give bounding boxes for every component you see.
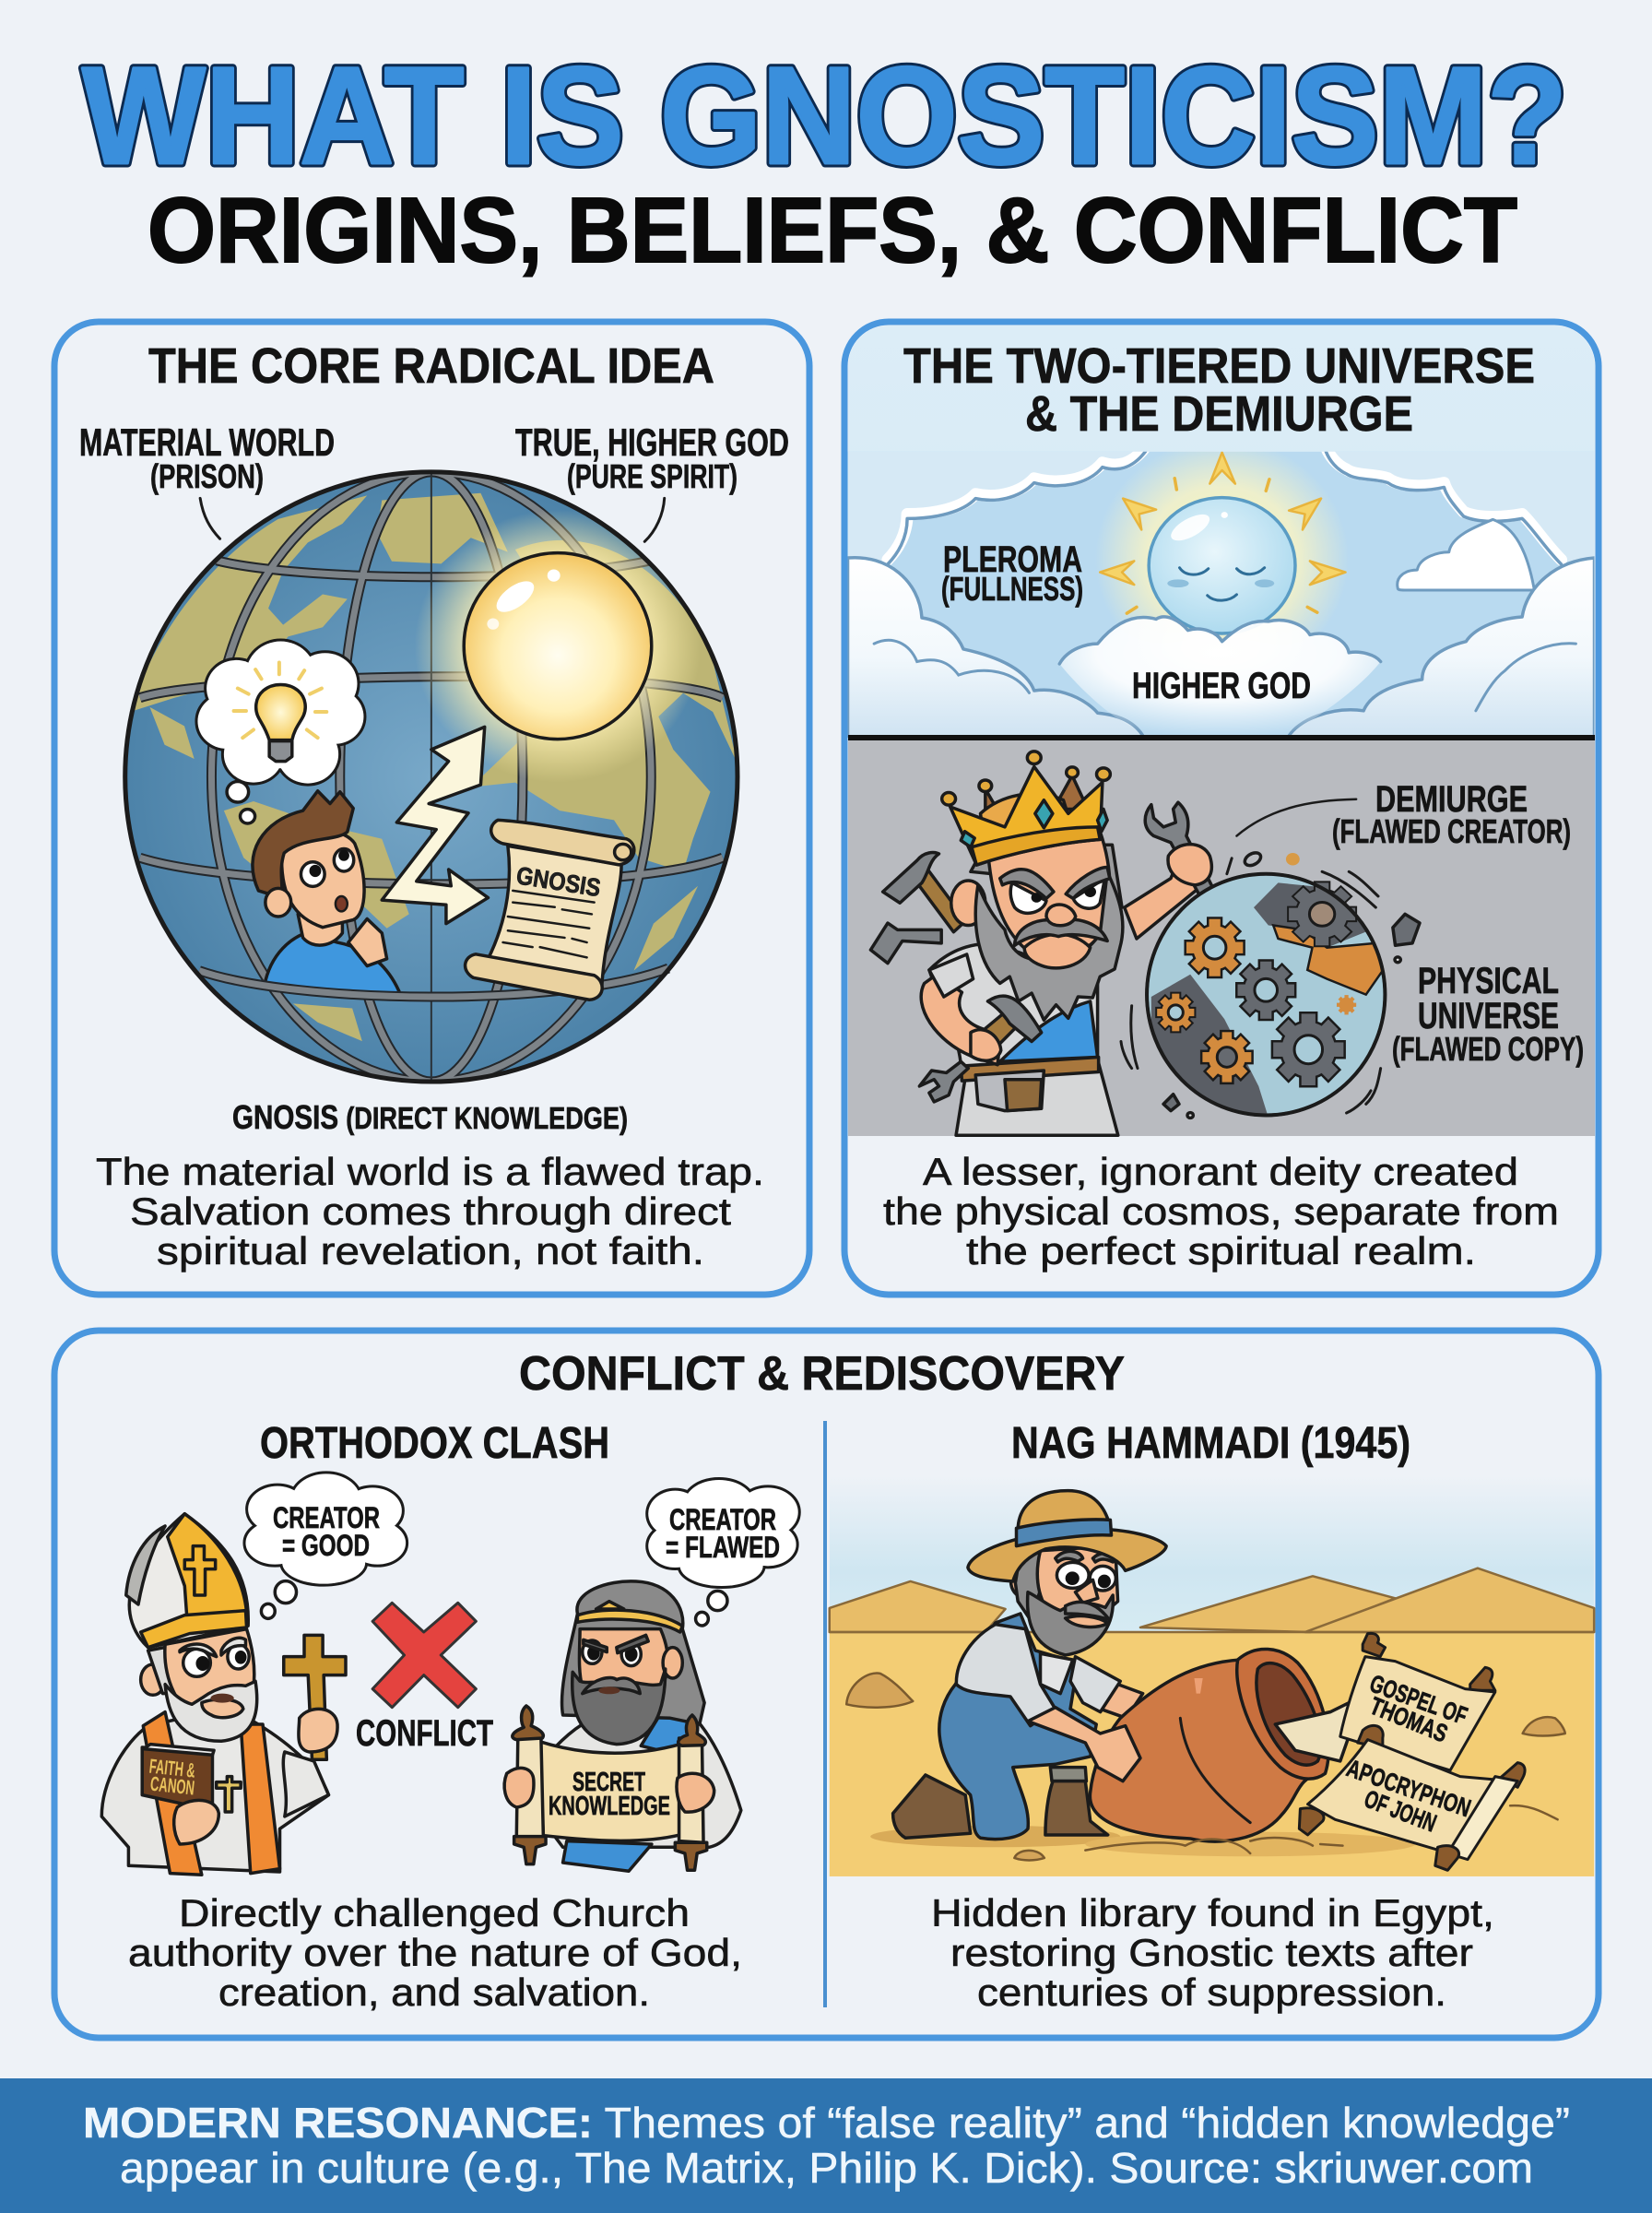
scroll text: KNOWLEDGE — [549, 1792, 670, 1821]
label: true higher god: (PURE SPIRIT) — [567, 457, 738, 495]
rocks — [846, 1674, 1565, 1860]
lower grid line — [199, 968, 668, 997]
scroll label: gnosis: GNOSIS — [514, 861, 603, 902]
label: material world: (PRISON) — [150, 457, 264, 495]
label: gnosis direct knowledge: GNOSIS (DIRECT KNOWLEDGE) — [232, 1098, 628, 1136]
scroll text: apocryphon of john: APOCRYPHON — [1343, 1754, 1474, 1822]
panel body text: spiritual revelation, not faith. — [157, 1229, 704, 1272]
demiurge labels: DEMIURGE — [1375, 779, 1528, 820]
illustration: nag hammadi desert scene — [830, 1475, 1594, 1876]
panel heading: THE CORE RADICAL IDEA — [148, 338, 714, 394]
scroll text: gospel of thomas — [1366, 1669, 1471, 1748]
panel: conflict and rediscovery — [54, 1331, 1599, 2038]
book label — [148, 1755, 196, 1800]
scroll text — [549, 1768, 670, 1821]
crown — [985, 775, 1088, 822]
panel body text: The material world is a flawed trap. — [96, 1150, 764, 1193]
scroll text: SECRET — [572, 1768, 645, 1797]
head — [1011, 1566, 1035, 1597]
raised arm and wrench — [1125, 867, 1202, 939]
conflict label: CONFLICT — [356, 1713, 493, 1754]
panel heading: & THE DEMIURGE — [1025, 386, 1413, 442]
scroll text: gospel of thomas: GOSPEL OF — [1366, 1669, 1471, 1730]
panel: the core radical idea — [54, 322, 809, 1295]
undershirt and bib strap — [1041, 1653, 1073, 1694]
globe illustration — [120, 467, 742, 1088]
label: material world: MATERIAL WORLD — [79, 420, 335, 464]
forearm behind jar — [1101, 1685, 1143, 1718]
illustration: orthodox clash — [101, 1473, 798, 1875]
bubble text: creator good — [273, 1501, 380, 1562]
body text: nag hammadi: restoring Gnostic texts after — [950, 1931, 1473, 1974]
illustration: pleroma and higher god — [848, 438, 1596, 738]
label: true higher god — [515, 420, 789, 495]
book label: CANON — [149, 1772, 195, 1800]
bubble text: creator good: = GOOD — [282, 1529, 370, 1562]
body text: nag hammadi: centuries of suppression. — [977, 1970, 1446, 2014]
panel frame — [844, 322, 1599, 1295]
panel heading — [903, 338, 1535, 442]
bubble text: creator flawed — [666, 1503, 780, 1564]
body text: orthodox clash — [128, 1891, 742, 2014]
jar — [1090, 1660, 1320, 1841]
panel body text: Salvation comes through direct — [130, 1189, 731, 1233]
demiurge labels — [1332, 779, 1571, 850]
body text: orthodox clash: creation, and salvation. — [218, 1970, 650, 2014]
panel heading: THE TWO-TIERED UNIVERSE — [903, 338, 1535, 394]
bubble text: creator flawed: = FLAWED — [666, 1531, 780, 1564]
column divider — [823, 1421, 827, 2007]
bishop — [101, 1718, 328, 1872]
panel body text — [883, 1150, 1559, 1272]
scroll — [483, 846, 621, 989]
red x — [372, 1603, 476, 1708]
lightning arrow — [382, 727, 488, 924]
thought bubble: creator good — [245, 1473, 406, 1618]
title: WHAT IS GNOSTICISM? — [82, 38, 1567, 193]
scroll text: apocryphon of john: OF JOHN — [1361, 1785, 1440, 1838]
panel frame — [54, 1331, 1599, 2038]
scroll: secret knowledge — [538, 1741, 680, 1840]
footer text — [83, 2099, 1570, 2192]
hammers behind — [912, 865, 966, 932]
body text: orthodox clash: Directly challenged Church — [179, 1891, 690, 1935]
bubble text: creator good: CREATOR — [273, 1501, 380, 1534]
subtitle: ORIGINS, BELIEFS, & CONFLICT — [148, 179, 1517, 282]
footer band — [0, 2078, 1652, 2213]
title: WHAT IS GNOSTICISM? — [82, 38, 1567, 193]
sub-heading: nag hammadi: NAG HAMMADI (1945) — [1011, 1419, 1410, 1468]
physical universe labels: (FLAWED COPY) — [1392, 1030, 1584, 1068]
body — [956, 1059, 1118, 1135]
panel body text: the perfect spiritual realm. — [966, 1229, 1476, 1272]
sub-heading: orthodox clash: ORTHODOX CLASH — [260, 1419, 609, 1468]
panel frame — [54, 322, 809, 1295]
label: material world — [79, 420, 335, 495]
head — [951, 881, 985, 925]
sky labels: HIGHER GOD — [1132, 666, 1311, 706]
panel: two-tiered universe — [844, 322, 1599, 1295]
thought cloud — [197, 642, 363, 823]
panel heading: CONFLICT & REDISCOVERY — [519, 1347, 1125, 1401]
physical universe labels: PHYSICAL — [1418, 961, 1559, 1001]
sky labels — [941, 539, 1311, 706]
bubble text: creator flawed: CREATOR — [669, 1503, 776, 1536]
panel body text: the physical cosmos, separate from — [883, 1189, 1559, 1233]
left arm and hammer — [921, 975, 1000, 1065]
scroll: apocryphon of john — [1299, 1725, 1525, 1870]
loose scroll in jar — [1275, 1699, 1355, 1761]
gnostic figure — [522, 1709, 741, 1847]
forearm and hand on jar — [1028, 1708, 1140, 1781]
footer text: MODERN RESONANCE: Themes of “false reality” and “hidden knowledge” — [83, 2099, 1570, 2147]
sky labels: PLEROMA — [943, 539, 1082, 580]
label: true higher god: TRUE, HIGHER GOD — [515, 420, 789, 464]
body text: nag hammadi — [931, 1891, 1494, 2014]
divider between realms — [848, 735, 1595, 740]
person — [265, 933, 401, 995]
body text: orthodox clash: authority over the nature of God, — [128, 1931, 742, 1974]
illustration: demiurge and flawed cosmos — [870, 751, 1420, 1135]
footer text: appear in culture (e.g., The Matrix, Philip K. Dick). Source: skriuwer.com — [120, 2144, 1533, 2192]
scroll text: gospel of thomas: THOMAS — [1366, 1692, 1452, 1748]
panel body text — [96, 1150, 764, 1272]
panel body text: A lesser, ignorant deity created — [923, 1150, 1518, 1193]
physical universe labels: UNIVERSE — [1418, 996, 1559, 1036]
sky labels: (FULLNESS) — [941, 570, 1083, 608]
body text: nag hammadi: Hidden library found in Egypt, — [931, 1891, 1494, 1935]
hat — [968, 1529, 1166, 1581]
thought bubble: creator flawed — [648, 1480, 798, 1626]
boots — [893, 1775, 971, 1838]
overalls — [939, 1614, 1096, 1840]
gray lower realm background — [848, 738, 1595, 1136]
book label: FAITH & — [148, 1755, 196, 1782]
sky background — [848, 325, 1595, 738]
flawed cosmos planet — [1147, 874, 1385, 1115]
physical universe labels — [1392, 961, 1584, 1068]
scroll: gospel of thomas — [1340, 1633, 1495, 1770]
